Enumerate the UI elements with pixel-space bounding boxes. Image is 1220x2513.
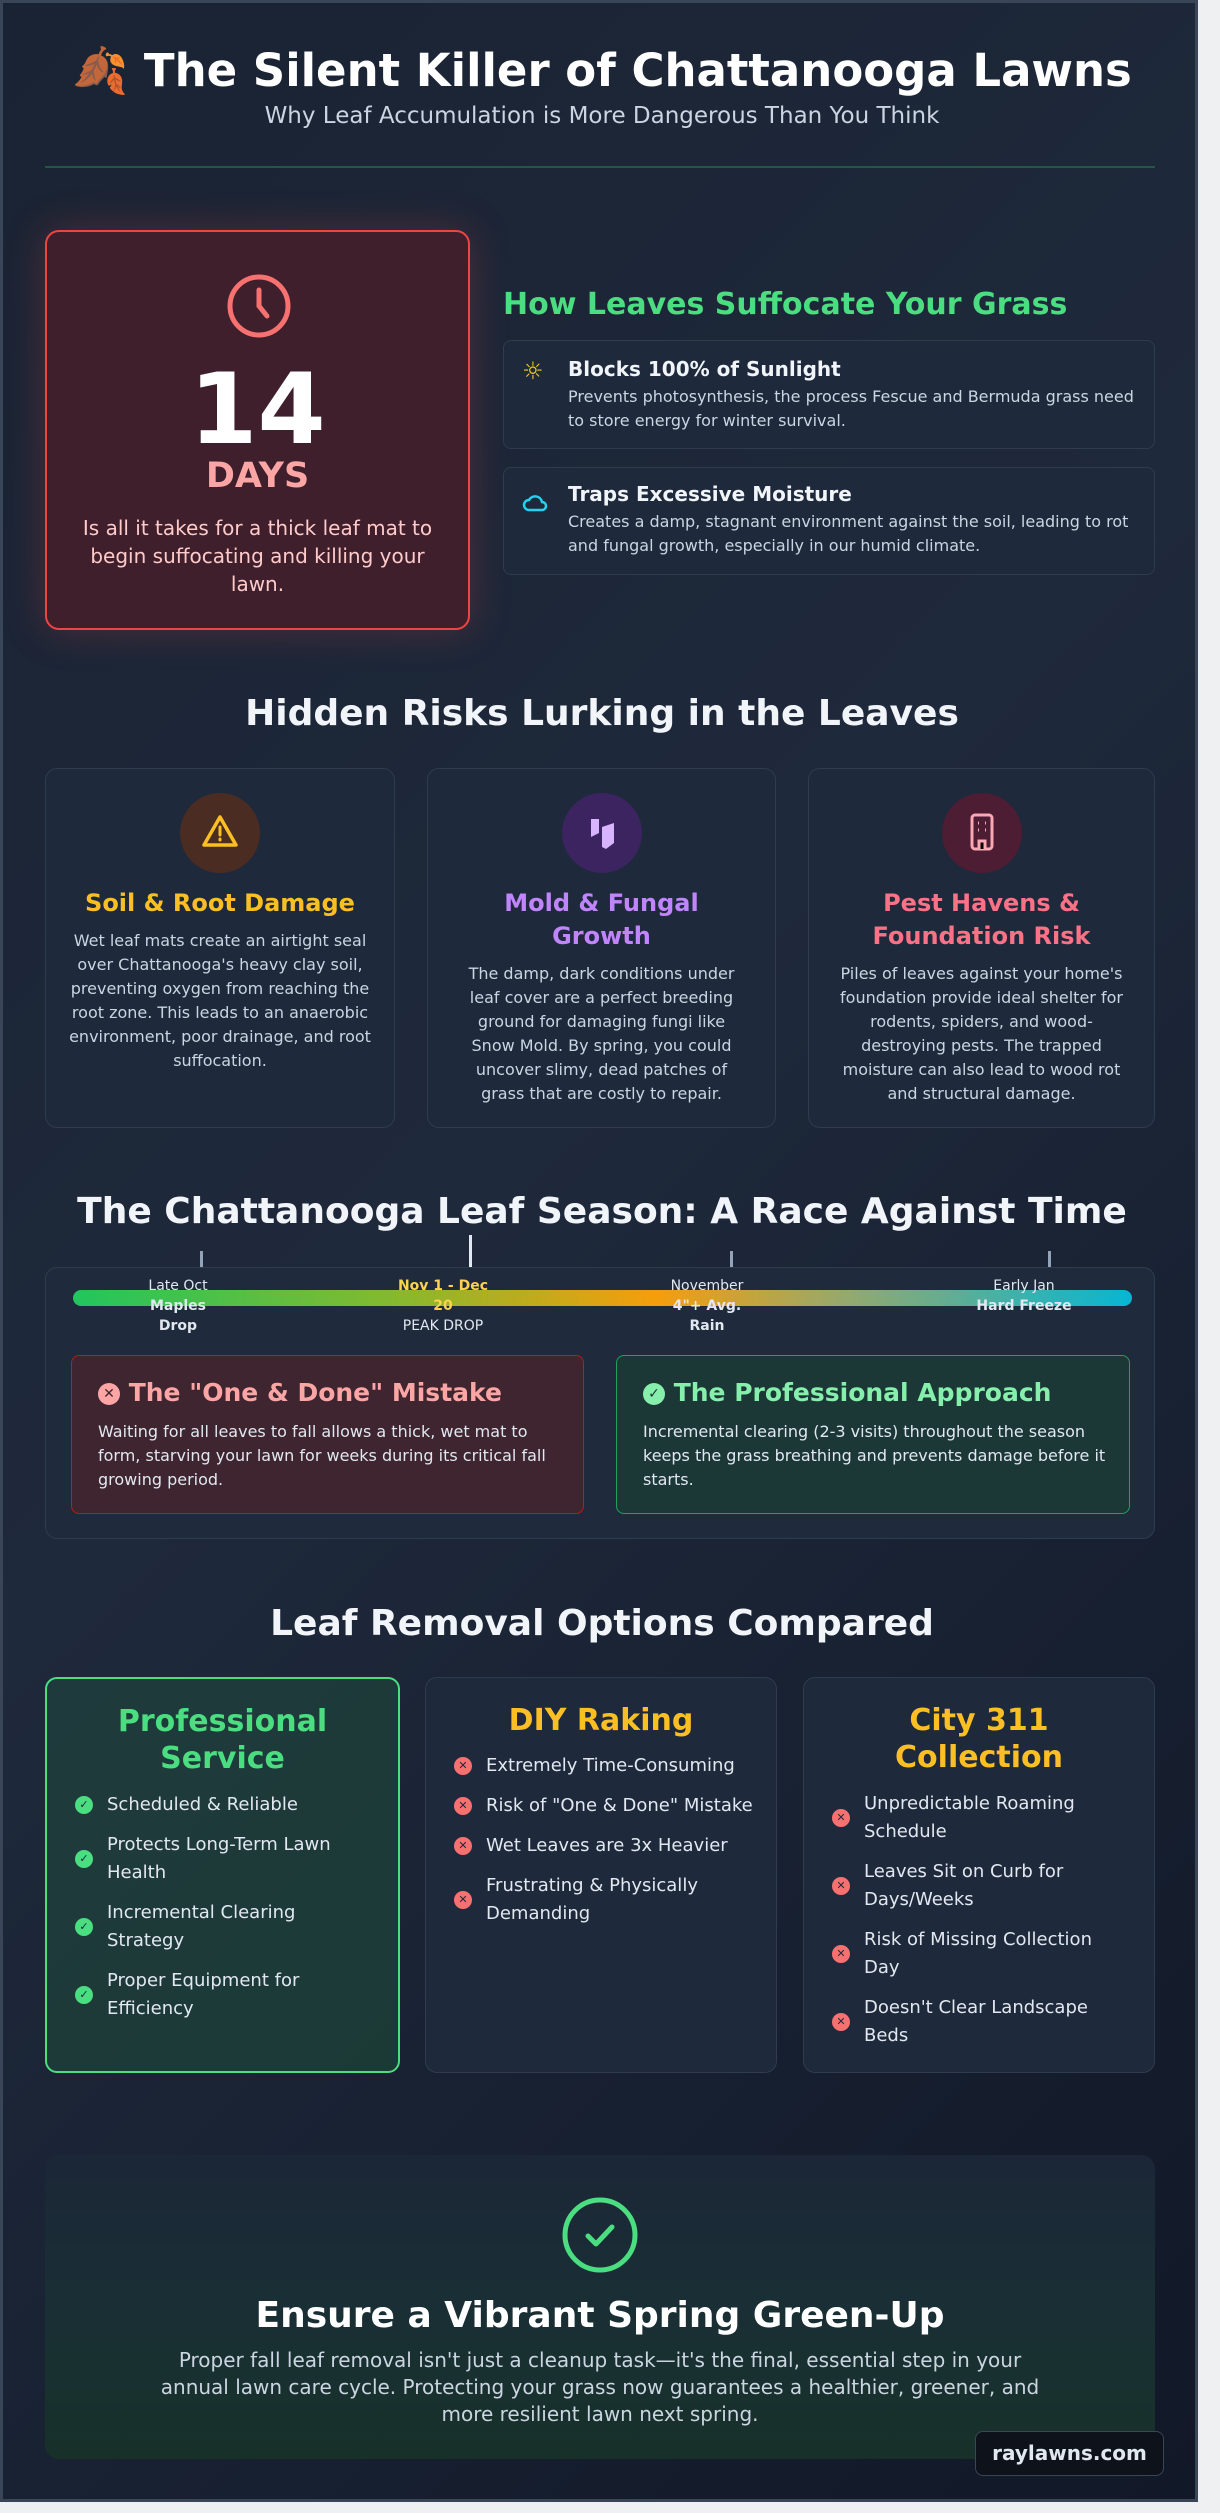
panel: professional service: ✓ (79, 1852, 89, 1865)
panel: timeline: November (671, 1278, 743, 1294)
callout: mistake (71, 1355, 584, 1514)
panel: spring green-up: Ensure a Vibrant Spring Green-Up (256, 2295, 944, 2336)
timeline labels: Maples (150, 1298, 206, 1314)
panel: city 311: ✕ (836, 1947, 846, 1960)
timeline labels: Late Oct (148, 1278, 208, 1294)
panel: timeline: 20 (433, 1298, 453, 1314)
panel: professional service: ✓ (79, 1798, 89, 1811)
panel: DIY: Extremely Time-Consuming (486, 1755, 735, 1776)
panel: professional service: Scheduled & Reliable (107, 1794, 298, 1815)
panel: professional service (45, 1677, 400, 2073)
panel: pests: Pest Havens & (883, 889, 1080, 917)
panel: DIY (425, 1677, 777, 2073)
panel: 14 days stat (45, 230, 470, 630)
panel: mold: Mold & Fungal (504, 889, 699, 917)
callout: mistake: Waiting for all leaves to fall allows a thick, wet mat to form, starving your lawn for weeks during its critical fall growing period. (98, 1422, 546, 1489)
panel: professional service: ✓ (79, 1988, 89, 2001)
panel: professional service: Incremental Clearing Strategy (107, 1902, 295, 1951)
panel: city 311: Risk of Missing Collection Day (864, 1929, 1092, 1978)
panel: DIY: Frustrating & Physically Demanding (486, 1875, 698, 1924)
card: moisture: Traps Excessive Moisture (568, 482, 852, 506)
panel: city 311: ✕ (836, 2015, 846, 2028)
card: moisture: Creates a damp, stagnant environment against the soil, leading to rot and fungal growth, especially in our humid climate. (568, 512, 1128, 555)
stat description: Is all it takes for a thick leaf mat to begin suffocating and killing your lawn. (83, 516, 432, 596)
stat label: DAYS (206, 456, 309, 496)
icon: sun: ☼ (522, 357, 544, 385)
panel: city 311: Leaves Sit on Curb for Days/Weeks (864, 1861, 1063, 1910)
panel: timeline (45, 1267, 1155, 1539)
card: sunlight (503, 340, 1155, 449)
panel: spring green-up: Proper fall leaf removal isn't just a cleanup task—it's the final, essential step in your annual lawn care cycle. Protecting your grass now guarantees a healthier, greener, and more resilient lawn next spring. (161, 2348, 1039, 2426)
panel: city 311: ✕ (836, 1879, 846, 1892)
heading: leaf season: The Chattanooga Leaf Season: A Race Against Time (77, 1191, 1127, 1232)
icon: building (942, 793, 1022, 873)
panel: city 311: City 311 (909, 1703, 1049, 1738)
panel: professional service: Professional (118, 1704, 327, 1739)
panel: city 311 (803, 1677, 1155, 2073)
panel: soil: Wet leaf mats create an airtight seal over Chattanooga's heavy clay soil, preventing oxygen from reaching the root zone. This leads to an anaerobic environment, poor drainage, and root suffocation. (69, 931, 371, 1070)
panel: timeline: Hard Freeze (976, 1298, 1072, 1314)
icon: clock (228, 274, 290, 338)
panel: timeline: 4"+ Avg. (673, 1298, 741, 1314)
panel: timeline: PEAK DROP (403, 1318, 483, 1334)
panel: professional service: ✓ (79, 1920, 89, 1933)
icon: check circle (562, 2198, 638, 2272)
callout: mistake: ✕ (103, 1386, 115, 1402)
panel: mold (427, 768, 776, 1128)
panel: soil (45, 768, 395, 1128)
panel: professional service: Proper Equipment for Efficiency (107, 1970, 299, 2019)
panel: city 311: Doesn't Clear Landscape Beds (864, 1997, 1088, 2046)
panel: mold: Growth (552, 922, 651, 950)
panel: professional service: Service (160, 1741, 285, 1776)
panel: soil: Soil & Root Damage (85, 889, 355, 917)
icon: cloud (522, 495, 548, 512)
card: sunlight: Blocks 100% of Sunlight (568, 357, 841, 381)
title: 🍂 The Silent Killer of Chattanooga Lawns (72, 44, 1132, 97)
card: sunlight: Prevents photosynthesis, the process Fescue and Bermuda grass need to store energy for winter survival. (568, 387, 1134, 430)
panel: DIY: ✕ (458, 1839, 468, 1852)
panel: DIY: Wet Leaves are 3x Heavier (486, 1835, 728, 1856)
panel: DIY: ✕ (458, 1799, 468, 1812)
panel: timeline: Early Jan (993, 1278, 1055, 1294)
card: moisture (503, 467, 1155, 575)
callout: mistake: The "One & Done" Mistake (129, 1378, 502, 1407)
icon: fungus (562, 793, 642, 873)
timeline labels (148, 1278, 208, 1334)
panel: DIY: Risk of "One & Done" Mistake (486, 1795, 753, 1816)
panel: mold: The damp, dark conditions under leaf cover are a perfect breeding ground for damaging fungi like Snow Mold. By spring, you could uncover slimy, dead patches of grass that are costly to repair. (469, 964, 734, 1103)
callout: professional: The Professional Approach (674, 1378, 1051, 1407)
heading: how leaves suffocate: How Leaves Suffocate Your Grass (503, 287, 1067, 322)
subtitle: Why Leaf Accumulation is More Dangerous Than You Think (265, 103, 939, 129)
badge: website: raylawns.com (992, 2441, 1147, 2465)
timeline ticks (200, 1235, 1051, 1267)
panel: pests: Piles of leaves against your home's foundation provide ideal shelter for rodents, spiders, and wood-destroying pests. The trapped moisture can also lead to wood rot and structural damage. (840, 964, 1123, 1103)
heading: hidden risks: Hidden Risks Lurking in the Leaves (245, 693, 959, 734)
badge: website (975, 2431, 1164, 2476)
gradient bar (73, 1290, 1132, 1306)
panel: pests: Foundation Risk (872, 922, 1091, 950)
panel: city 311: Unpredictable Roaming Schedule (864, 1793, 1075, 1842)
icon: warning (180, 793, 260, 873)
panel: professional service: Protects Long-Term Lawn Health (107, 1834, 331, 1883)
panel: timeline: Rain (690, 1318, 724, 1334)
panel: city 311: Collection (895, 1740, 1063, 1775)
callout: professional: ✓ (648, 1386, 660, 1402)
panel: city 311: ✕ (836, 1811, 846, 1824)
stat number: 14 (189, 353, 326, 467)
heading: options compared: Leaf Removal Options Compared (270, 1603, 934, 1644)
panel: pests (808, 768, 1155, 1128)
panel: spring green-up (45, 2155, 1155, 2459)
callout: professional (616, 1355, 1130, 1514)
panel: DIY: ✕ (458, 1759, 468, 1772)
panel: DIY: DIY Raking (509, 1703, 693, 1738)
panel: timeline: Nov 1 - Dec (398, 1278, 488, 1294)
callout: professional: Incremental clearing (2-3 visits) throughout the season keeps the grass breathing and prevents damage before it starts. (643, 1422, 1105, 1489)
timeline labels: Drop (159, 1318, 197, 1334)
panel: DIY: ✕ (458, 1893, 468, 1906)
